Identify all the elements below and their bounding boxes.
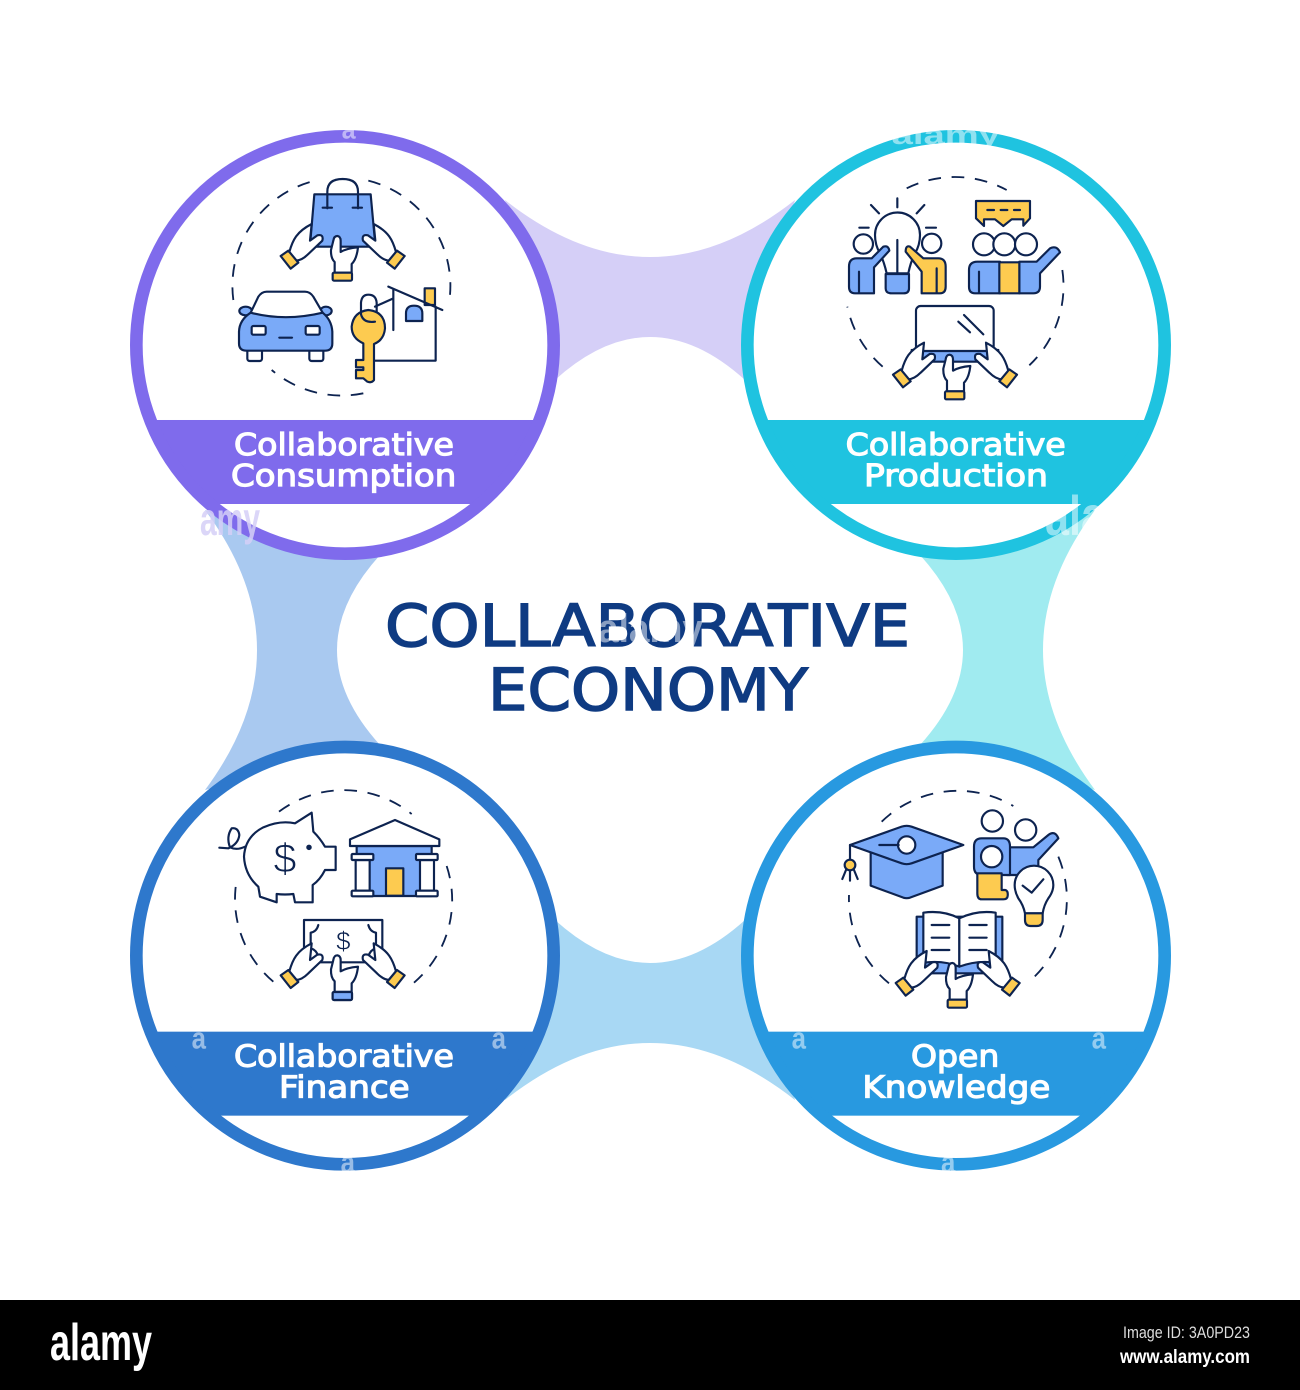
ring — [136, 747, 554, 1164]
watermarks — [192, 1021, 507, 1180]
icon: hands — [281, 943, 405, 1000]
panel background — [135, 135, 555, 555]
watermarks: between panels — [200, 484, 1106, 651]
icon: banknote — [304, 920, 382, 962]
label band — [158, 1032, 532, 1116]
labels: Knowledge — [862, 1071, 1050, 1106]
icon: bank — [350, 820, 439, 896]
icon: key — [352, 295, 385, 382]
labels — [862, 1040, 1050, 1106]
panel: collaborative finance — [130, 746, 560, 1180]
watermarks: a — [1092, 1021, 1107, 1055]
icon: graduation cap — [842, 826, 963, 898]
title: ECONOMY — [488, 656, 809, 724]
dashed circle — [232, 181, 450, 396]
title: COLLABORATIVE — [385, 592, 910, 660]
icon: house — [375, 287, 442, 361]
icon: open book — [917, 912, 1002, 973]
labels: Collaborative — [846, 428, 1066, 463]
icon: laptop — [912, 306, 998, 362]
watermarks — [792, 1021, 1107, 1180]
labels: Open — [911, 1040, 999, 1075]
icon: speech bubble — [976, 201, 1030, 226]
watermarks: between panels: amy — [200, 493, 260, 545]
icon: hands — [281, 224, 405, 281]
watermarks: between panels: ala — [1045, 484, 1106, 547]
labels — [234, 1040, 454, 1106]
watermarks: a — [492, 1021, 507, 1055]
watermarks: a — [341, 1146, 356, 1180]
dashed circle — [235, 790, 452, 983]
ring — [747, 747, 1165, 1164]
watermarks: a — [792, 1021, 807, 1055]
icon: lightbulb with two people — [849, 198, 946, 293]
connector: purple — [505, 200, 795, 380]
label band — [768, 1032, 1144, 1116]
watermark: a — [342, 115, 356, 145]
labels: Collaborative — [234, 428, 454, 463]
icon: hands — [896, 951, 1020, 1008]
dashed circle — [849, 791, 1067, 983]
labels — [231, 428, 456, 494]
icon: shopping bag — [310, 179, 375, 247]
icon: lightbulb with check — [1015, 866, 1053, 926]
labels: Collaborative — [234, 1040, 454, 1075]
icon: hands — [893, 343, 1017, 399]
labels: Production — [864, 459, 1048, 494]
ring — [747, 136, 1165, 554]
labels — [846, 428, 1066, 494]
connector: aqua right — [920, 510, 1095, 790]
image id: Image ID: 3A0PD23 — [1123, 1323, 1250, 1342]
labels: Consumption — [231, 459, 456, 494]
watermark: alamy — [892, 120, 1000, 150]
dashed circle — [847, 177, 1064, 367]
watermarks: a — [192, 1021, 207, 1055]
panel background — [135, 746, 555, 1166]
footer bar — [0, 1300, 1300, 1390]
icon: car — [239, 292, 332, 361]
website: www.alamy.com — [1119, 1347, 1250, 1368]
panel: open knowledge — [741, 746, 1173, 1180]
watermarks: a — [941, 1146, 956, 1180]
panel background — [746, 746, 1166, 1166]
label band — [768, 420, 1144, 504]
panel background — [746, 135, 1166, 555]
icon: people — [974, 810, 1058, 899]
connector: light blue bottom — [505, 920, 795, 1100]
panel: collaborative production — [741, 120, 1173, 555]
icon: piggy bank — [219, 813, 336, 902]
panel: collaborative consumption — [130, 115, 560, 555]
icon: banknote: $ — [336, 926, 351, 956]
connector: blue left — [205, 510, 380, 790]
title — [385, 592, 910, 724]
label band — [157, 420, 533, 504]
footer logo: alamy — [50, 1314, 152, 1372]
ring — [136, 136, 554, 554]
labels: Finance — [279, 1071, 410, 1106]
watermarks: between panels: alamy — [598, 607, 704, 651]
icon: group of people — [969, 233, 1060, 293]
icon: piggy bank: $ — [273, 835, 297, 882]
